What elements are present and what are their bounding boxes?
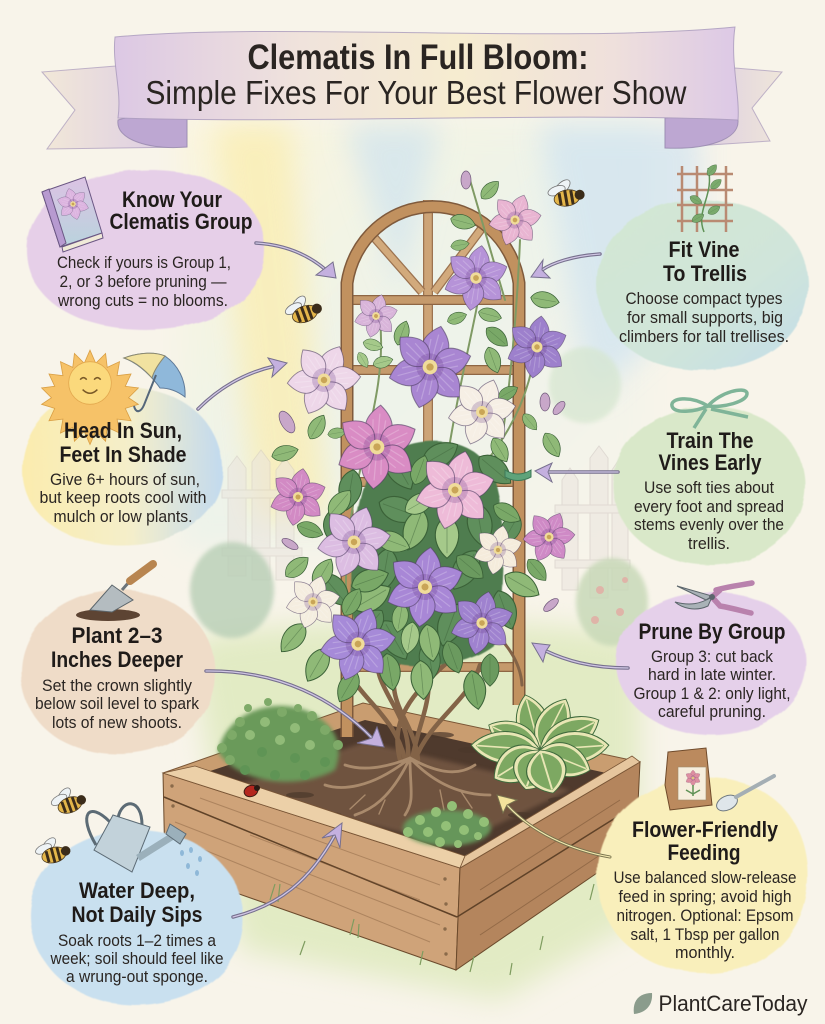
hosta plant <box>470 691 610 799</box>
heading: Know Your <box>122 187 222 212</box>
panel: water deep <box>30 804 243 1005</box>
body text: wrong cuts = no blooms. <box>57 291 228 310</box>
heading <box>110 187 252 234</box>
body text <box>634 647 790 721</box>
icon: ribbon <box>672 390 748 428</box>
panel blob <box>597 777 808 973</box>
body text: Check if yours is Group 1, <box>57 253 231 272</box>
background garden: left fence <box>222 450 302 580</box>
back leaves <box>313 435 527 680</box>
panel: fit vine to trellis <box>597 162 808 370</box>
body text: for small supports, big <box>627 308 783 327</box>
panel blob <box>613 407 805 565</box>
body text: Give 6+ hours of sun, <box>50 470 200 489</box>
arrow: feeding to soil <box>497 795 610 857</box>
body text: every foot and spread <box>634 497 784 516</box>
icon: mini trellis <box>677 162 733 232</box>
background garden: tree and bushes <box>190 347 648 646</box>
heading: To Trellis <box>663 261 747 286</box>
bee: by trellis <box>280 288 325 328</box>
heading <box>658 428 762 475</box>
green vine tie <box>505 470 531 480</box>
body text: Choose compact types <box>626 289 782 308</box>
body text: feed in spring; avoid high <box>618 887 792 906</box>
grass tufts <box>270 884 594 975</box>
body text: salt, 1 Tbsp per gallon <box>630 925 780 944</box>
title line one: Clematis In Full Bloom: <box>248 38 588 77</box>
bed front face <box>163 773 460 970</box>
herb plant <box>217 698 343 782</box>
body text: 2, or 3 before pruning — <box>60 272 226 291</box>
heading: Fit Vine <box>668 237 740 262</box>
front leaves <box>270 177 565 711</box>
heading <box>51 623 183 672</box>
raised garden bed <box>163 703 640 970</box>
bee: top right <box>545 174 586 209</box>
body text: monthly. <box>675 943 735 962</box>
roots and stems <box>325 180 535 815</box>
title banner <box>42 27 782 149</box>
heading: Train The <box>666 428 754 453</box>
heading <box>663 237 747 286</box>
icon: fertilizer bag <box>665 748 712 810</box>
heading <box>632 817 779 865</box>
body text <box>35 676 199 732</box>
body text <box>619 289 789 346</box>
panel: know your clematis group <box>27 170 265 330</box>
bed back rim <box>163 703 640 778</box>
icon: book <box>42 177 103 252</box>
body text: Set the crown slightly <box>42 676 192 695</box>
panel blob <box>27 170 265 330</box>
heading: Prune By Group <box>638 619 786 644</box>
body text: Soak roots 1–2 times a <box>58 931 216 950</box>
body text: trellis. <box>688 534 730 553</box>
body text <box>614 868 796 962</box>
arrow: train to tie <box>535 463 618 482</box>
banner right tail <box>665 68 782 148</box>
banner body <box>114 27 738 120</box>
arrow: prune to trellis <box>532 643 628 668</box>
body text <box>40 470 206 526</box>
background garden: lawn <box>190 621 640 1000</box>
icon: water drops <box>180 847 202 876</box>
panel: plant deeper <box>21 564 215 754</box>
heading <box>72 878 202 927</box>
background garden: right fence <box>555 446 630 598</box>
arrow: water to bed <box>233 823 342 917</box>
trellis cross bars <box>423 200 433 480</box>
heading: Vines Early <box>658 450 762 475</box>
body text: but keep roots cool with <box>40 488 206 507</box>
logo text: PlantCareToday <box>658 991 808 1016</box>
heading: Not Daily Sips <box>72 902 202 927</box>
heading: Head In Sun, <box>64 418 182 443</box>
body text: Use balanced slow-release <box>614 868 796 887</box>
body text <box>57 253 231 310</box>
foliage mass <box>351 441 503 666</box>
bee: upper left of watering can <box>47 781 89 818</box>
icon: watering can <box>87 804 186 872</box>
sky wash and light rays <box>180 120 700 550</box>
icon: trowel <box>76 564 153 621</box>
clematis flowers <box>264 186 584 693</box>
panel blob <box>30 830 243 1005</box>
flower buds <box>276 171 567 614</box>
icon: pruners <box>675 583 752 613</box>
soil clods <box>261 732 572 838</box>
icon: logo leaf <box>634 993 652 1014</box>
body text: stems evenly over the <box>634 515 784 534</box>
body text: careful pruning. <box>658 702 766 721</box>
heading: Feet In Shade <box>60 442 186 467</box>
body text: week; soil should feel like <box>50 949 224 968</box>
panel blob <box>21 590 215 754</box>
trellis <box>347 200 520 737</box>
body text: Group 1 & 2: only light, <box>634 684 790 703</box>
panel: prune by group <box>616 583 806 735</box>
panel: flower-friendly feeding <box>597 748 808 973</box>
panel blob <box>616 592 806 735</box>
arrow: plant to roots <box>206 671 384 747</box>
body text: below soil level to spark <box>35 694 199 713</box>
groundcover plant <box>403 801 491 848</box>
icon: spoon <box>714 776 774 814</box>
arrow: fit vine to trellis <box>531 254 600 278</box>
panel: train the vines <box>613 390 805 565</box>
body text: lots of new shoots. <box>52 713 182 732</box>
icon: umbrella <box>124 353 185 411</box>
title line two: Simple Fixes For Your Best Flower Show <box>146 74 687 111</box>
body text: climbers for tall trellises. <box>619 327 789 346</box>
body text: Group 3: cut back <box>651 647 773 666</box>
logo <box>634 991 808 1016</box>
icon: sun <box>42 350 138 444</box>
heading: Plant 2–3 <box>72 623 162 648</box>
trellis arch and posts <box>347 207 519 737</box>
banner right fold <box>665 116 738 148</box>
panel: head in sun <box>22 350 223 545</box>
body text: Use soft ties about <box>644 478 774 497</box>
body text: mulch or low plants. <box>54 507 192 526</box>
bee: lower left of watering can <box>32 831 72 867</box>
body text <box>50 931 224 986</box>
body text: hard in late winter. <box>648 665 776 684</box>
ladybug <box>243 783 260 799</box>
arrow: group to trellis <box>256 243 336 278</box>
body text: nitrogen. Optional: Epsom <box>616 906 794 925</box>
panel blob <box>597 200 808 370</box>
banner left fold <box>118 116 187 148</box>
bed right face <box>456 762 640 970</box>
heading: Water Deep, <box>79 878 195 903</box>
heading: Feeding <box>668 840 740 865</box>
panel blob <box>22 387 223 545</box>
soil <box>195 720 620 858</box>
heading: Inches Deeper <box>51 647 183 672</box>
body text <box>634 478 784 553</box>
foliage <box>270 171 567 711</box>
heading: Flower-Friendly <box>632 817 779 842</box>
body text: a wrung-out sponge. <box>66 967 208 986</box>
banner left tail <box>42 66 187 149</box>
arrow: sun to trellis <box>198 358 287 409</box>
arrows <box>198 243 628 917</box>
heading: Clematis Group <box>110 209 252 234</box>
heading <box>60 418 186 467</box>
